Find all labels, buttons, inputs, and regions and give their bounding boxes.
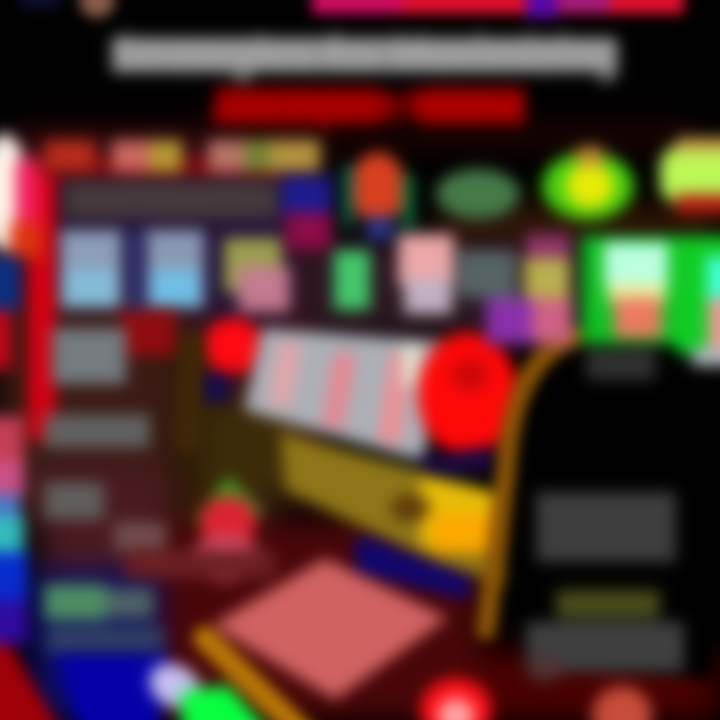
- title: Strategies for Maximizing: [110, 26, 620, 82]
- gold trim lines: [186, 336, 575, 720]
- big red button: [418, 332, 518, 456]
- top banner: [312, 0, 684, 18]
- subtitle: Jackpot Wins: [208, 81, 526, 130]
- left lower panels: [44, 328, 166, 654]
- top row lights: left machine: [45, 140, 320, 172]
- yellow control panel: [280, 432, 505, 585]
- black cabinet: [525, 340, 712, 680]
- bottom lights: [420, 678, 652, 720]
- green and red bell icon: [125, 476, 275, 582]
- dark header panel: [64, 182, 278, 218]
- left machine frame: [0, 134, 280, 440]
- blue base with white and green lights: [55, 654, 280, 720]
- side blue-purple accents: [120, 176, 332, 356]
- top left icon: [20, 0, 115, 18]
- left edge colour strip: [0, 416, 70, 720]
- right green machine: [582, 236, 720, 366]
- pink keypad: [212, 558, 448, 700]
- left reels: [60, 230, 290, 312]
- middle reels row: [334, 234, 572, 344]
- center slanted reels: [244, 328, 444, 462]
- center red button: [200, 318, 263, 402]
- dark blue strip: [355, 446, 494, 600]
- cabinet panels: [526, 348, 684, 682]
- top right lights: [342, 138, 720, 240]
